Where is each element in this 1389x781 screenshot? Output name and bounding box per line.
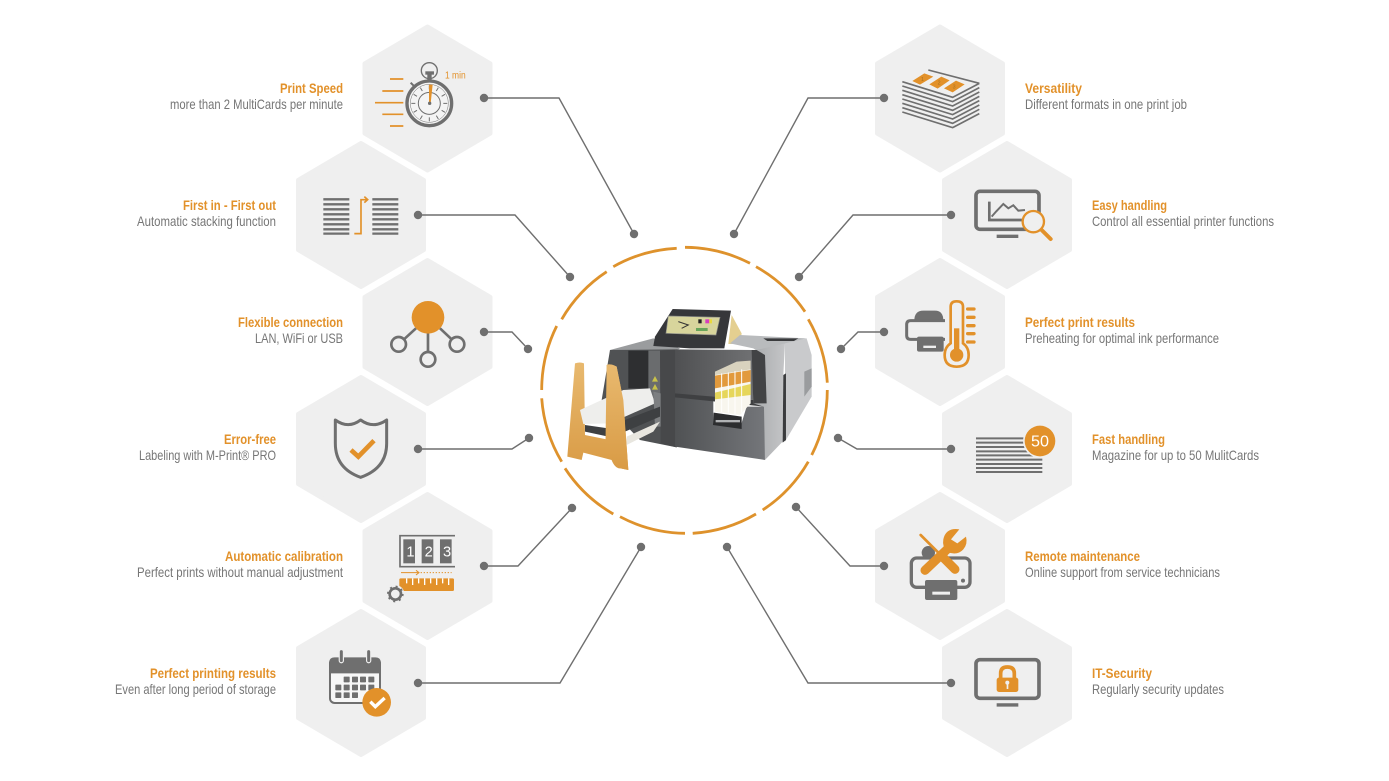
feature: First in - First out — [137, 143, 574, 287]
icon: printer with thermometer — [907, 301, 974, 367]
hexagon — [877, 26, 1003, 170]
icon: shield — [335, 420, 387, 477]
hexagon — [298, 377, 424, 521]
icon: network — [391, 301, 464, 367]
icon: calibration: 1 — [406, 545, 414, 561]
heading: Flexible connection — [238, 314, 343, 330]
heading: Perfect printing results — [150, 665, 276, 681]
icon: paper stack — [902, 70, 979, 128]
icon: paper stack: 1 — [921, 77, 924, 83]
description: Preheating for optimal ink performance — [1025, 330, 1219, 346]
connector — [480, 504, 576, 570]
description: Automatic stacking function — [137, 213, 276, 229]
feature: Fast handling — [834, 377, 1259, 521]
description: Online support from service technicians — [1025, 564, 1220, 580]
heading: Easy handling — [1092, 197, 1167, 213]
heading: Automatic calibration — [225, 548, 343, 564]
connector — [792, 503, 888, 570]
icon: stopwatch: 1 min — [445, 71, 466, 82]
connector — [730, 94, 888, 238]
feature: IT-Security — [723, 543, 1224, 755]
icon: calendar — [329, 652, 391, 717]
feature: Automatic calibration — [137, 494, 576, 638]
icon: paper stack: 2 — [938, 81, 941, 87]
heading: Print Speed — [280, 80, 343, 96]
feature: Perfect printing results — [115, 543, 645, 755]
heading: Versatility — [1025, 80, 1082, 96]
dashed orange ring — [542, 247, 827, 533]
connector — [414, 543, 645, 687]
heading: Remote maintenance — [1025, 548, 1140, 564]
icon: calibration: 2 — [425, 545, 433, 561]
description: Control all essential printer functions — [1092, 213, 1274, 229]
feature: Easy handling — [795, 143, 1274, 287]
hexagon — [877, 260, 1003, 404]
icon: stopwatch — [375, 63, 466, 126]
hexagon — [944, 143, 1070, 287]
connector — [414, 434, 533, 453]
connector — [723, 543, 955, 687]
icon: calibration: 3 — [443, 545, 451, 561]
connector — [414, 211, 574, 281]
hexagon — [944, 611, 1070, 755]
hexagon — [364, 26, 490, 170]
hexagon — [944, 377, 1070, 521]
description: Labeling with M-Print® PRO — [139, 447, 276, 463]
description: LAN, WiFi or USB — [255, 330, 343, 346]
central printer illustration — [567, 309, 812, 470]
description: Regularly security updates — [1092, 681, 1224, 697]
feature: Perfect print results — [837, 260, 1219, 404]
description: Different formats in one print job — [1025, 96, 1187, 112]
heading: Perfect print results — [1025, 314, 1135, 330]
icon: stacking — [323, 197, 398, 234]
feature: Flexible connection — [238, 260, 532, 404]
connector — [834, 434, 955, 453]
feature: Versatility — [730, 26, 1187, 238]
icon: printer with tools — [911, 529, 970, 600]
description: Perfect prints without manual adjustment — [137, 564, 343, 580]
connector — [480, 328, 532, 353]
icon: monitor with lock — [976, 660, 1039, 705]
description: Even after long period of storage — [115, 681, 276, 697]
icon: magazine 50: 50 — [1031, 434, 1049, 451]
heading: Fast handling — [1092, 431, 1165, 447]
heading: Error-free — [224, 431, 276, 447]
connector — [795, 211, 955, 281]
description: more than 2 MultiCards per minute — [170, 96, 343, 112]
hexagon — [298, 143, 424, 287]
connector — [480, 94, 638, 238]
hexagon — [364, 494, 490, 638]
hexagon — [364, 260, 490, 404]
description: Magazine for up to 50 MulitCards — [1092, 447, 1259, 463]
icon: magazine 50 — [976, 424, 1057, 472]
heading: First in - First out — [183, 197, 276, 213]
connector — [837, 328, 888, 353]
feature: Remote maintenance — [792, 494, 1220, 638]
feature: Print Speed — [170, 26, 638, 238]
icon: paper stack: 3 — [953, 85, 956, 91]
hexagon — [877, 494, 1003, 638]
hexagon — [298, 611, 424, 755]
icon: calibration — [386, 536, 455, 603]
feature: Error-free — [139, 377, 533, 521]
icon: monitor with magnifier — [976, 191, 1051, 239]
heading: IT-Security — [1092, 665, 1152, 681]
